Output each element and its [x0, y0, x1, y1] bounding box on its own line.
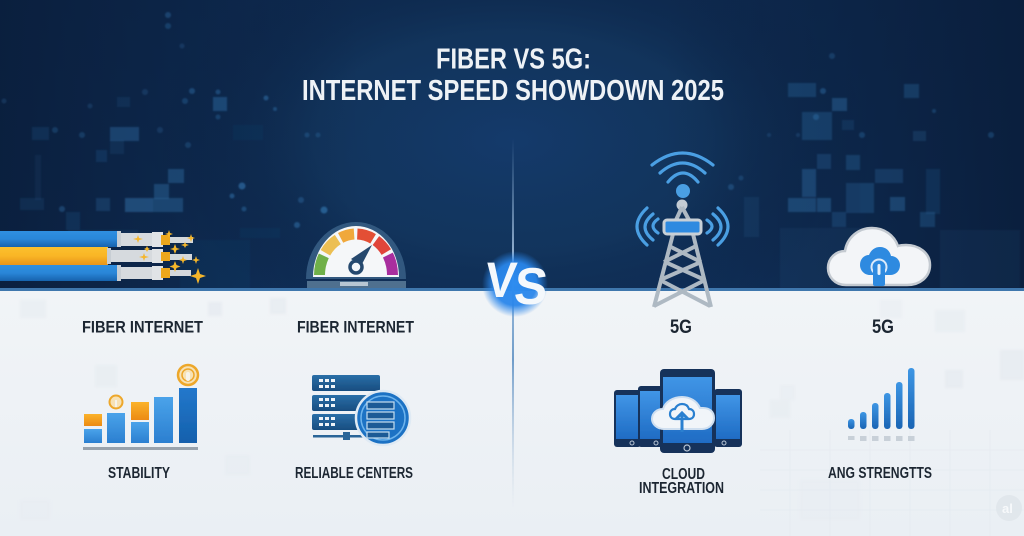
- icon: smartphones with cloud: [614, 369, 742, 453]
- horizon line: [0, 288, 1024, 291]
- icon: 5G cell tower: [637, 153, 728, 307]
- label: signal strengths: ANG STRENGTTS: [828, 465, 932, 482]
- label: cloud integration: [639, 466, 724, 497]
- icon: sparkles: [133, 230, 206, 284]
- title: FIBER VS 5G:: [436, 44, 591, 76]
- icon: cloud with touch symbol: [828, 228, 930, 286]
- label: cloud integration: CLOUD: [662, 466, 705, 483]
- icon: fiber optic cables: [0, 230, 206, 284]
- label: fiber internet 2: FIBER INTERNET: [297, 318, 415, 336]
- VS badge: S: [512, 258, 550, 316]
- VS badge: [482, 251, 550, 317]
- title: INTERNET SPEED SHOWDOWN 2025: [302, 75, 724, 107]
- watermark badge: al: [1002, 501, 1013, 516]
- label: stability: STABILITY: [108, 465, 170, 482]
- label: 5G 1: 5G: [670, 317, 692, 338]
- digital pixel texture, right: [728, 53, 1020, 288]
- label: 5G 2: 5G: [872, 317, 894, 338]
- icon: server with globe: [312, 375, 410, 445]
- label: fiber internet 1: FIBER INTERNET: [82, 318, 204, 336]
- label: reliable centers: RELIABLE CENTERS: [295, 465, 413, 482]
- title: [302, 44, 724, 107]
- digital pixel texture, left: [2, 12, 328, 290]
- VS badge: V: [483, 252, 519, 308]
- light lower background: [0, 291, 1024, 536]
- icon: speedometer gauge: [306, 222, 406, 288]
- icon: signal strength bars: [848, 368, 914, 441]
- center divider line: [512, 138, 514, 508]
- icon: stability bar chart: [83, 365, 198, 450]
- watermark badge: [996, 495, 1022, 521]
- label: cloud integration: INTEGRATION: [639, 480, 724, 497]
- dark upper background: [0, 0, 1024, 360]
